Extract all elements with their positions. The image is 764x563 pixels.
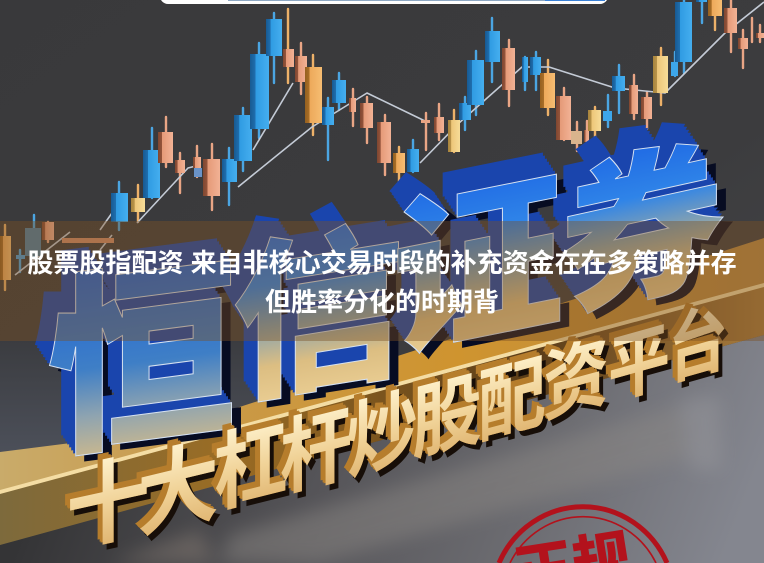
gold subtitle lettering: 资 [543, 328, 609, 432]
gold subtitle lettering: 平 [608, 314, 670, 414]
big 3D title lettering: 信 [232, 206, 404, 426]
platform highlight edge [0, 283, 764, 494]
gold subtitle lettering: 炒 [346, 379, 418, 491]
headline text: 但胜率分化的时期背 [265, 287, 499, 317]
caption band overlay [0, 221, 764, 341]
big 3D title lettering: 证 [392, 155, 564, 381]
gold subtitle lettering: 大 [137, 430, 219, 550]
trend lines [15, 2, 764, 275]
big 3D title lettering: 券 [560, 123, 724, 341]
gold subtitle lettering [66, 295, 728, 563]
gold subtitle lettering: 杠 [214, 411, 288, 525]
lower wall tint [0, 340, 300, 500]
gold platform front face [0, 285, 764, 545]
red stamp rings [499, 507, 667, 563]
gold subtitle lettering: 股 [412, 364, 482, 472]
gold subtitle lettering: 十 [66, 444, 150, 563]
top white pill banner [160, 0, 608, 4]
gold platform top face [0, 238, 764, 492]
headline text: 股票股指配资 来自非核心交易时段的补充资金在在多策略并存 [27, 248, 737, 278]
wicks [5, 0, 760, 290]
candle bodies [0, 0, 764, 280]
gold subtitle lettering: 配 [478, 346, 546, 454]
big 3D title lettering [47, 123, 724, 482]
big 3D title lettering: 恒 [47, 242, 237, 482]
gold subtitle lettering: 台 [668, 295, 728, 395]
candlestick chart [0, 0, 764, 290]
floor reflections [110, 395, 722, 563]
gold subtitle lettering: 杆 [280, 397, 352, 507]
floor surface [0, 335, 764, 563]
headline text [27, 248, 737, 317]
